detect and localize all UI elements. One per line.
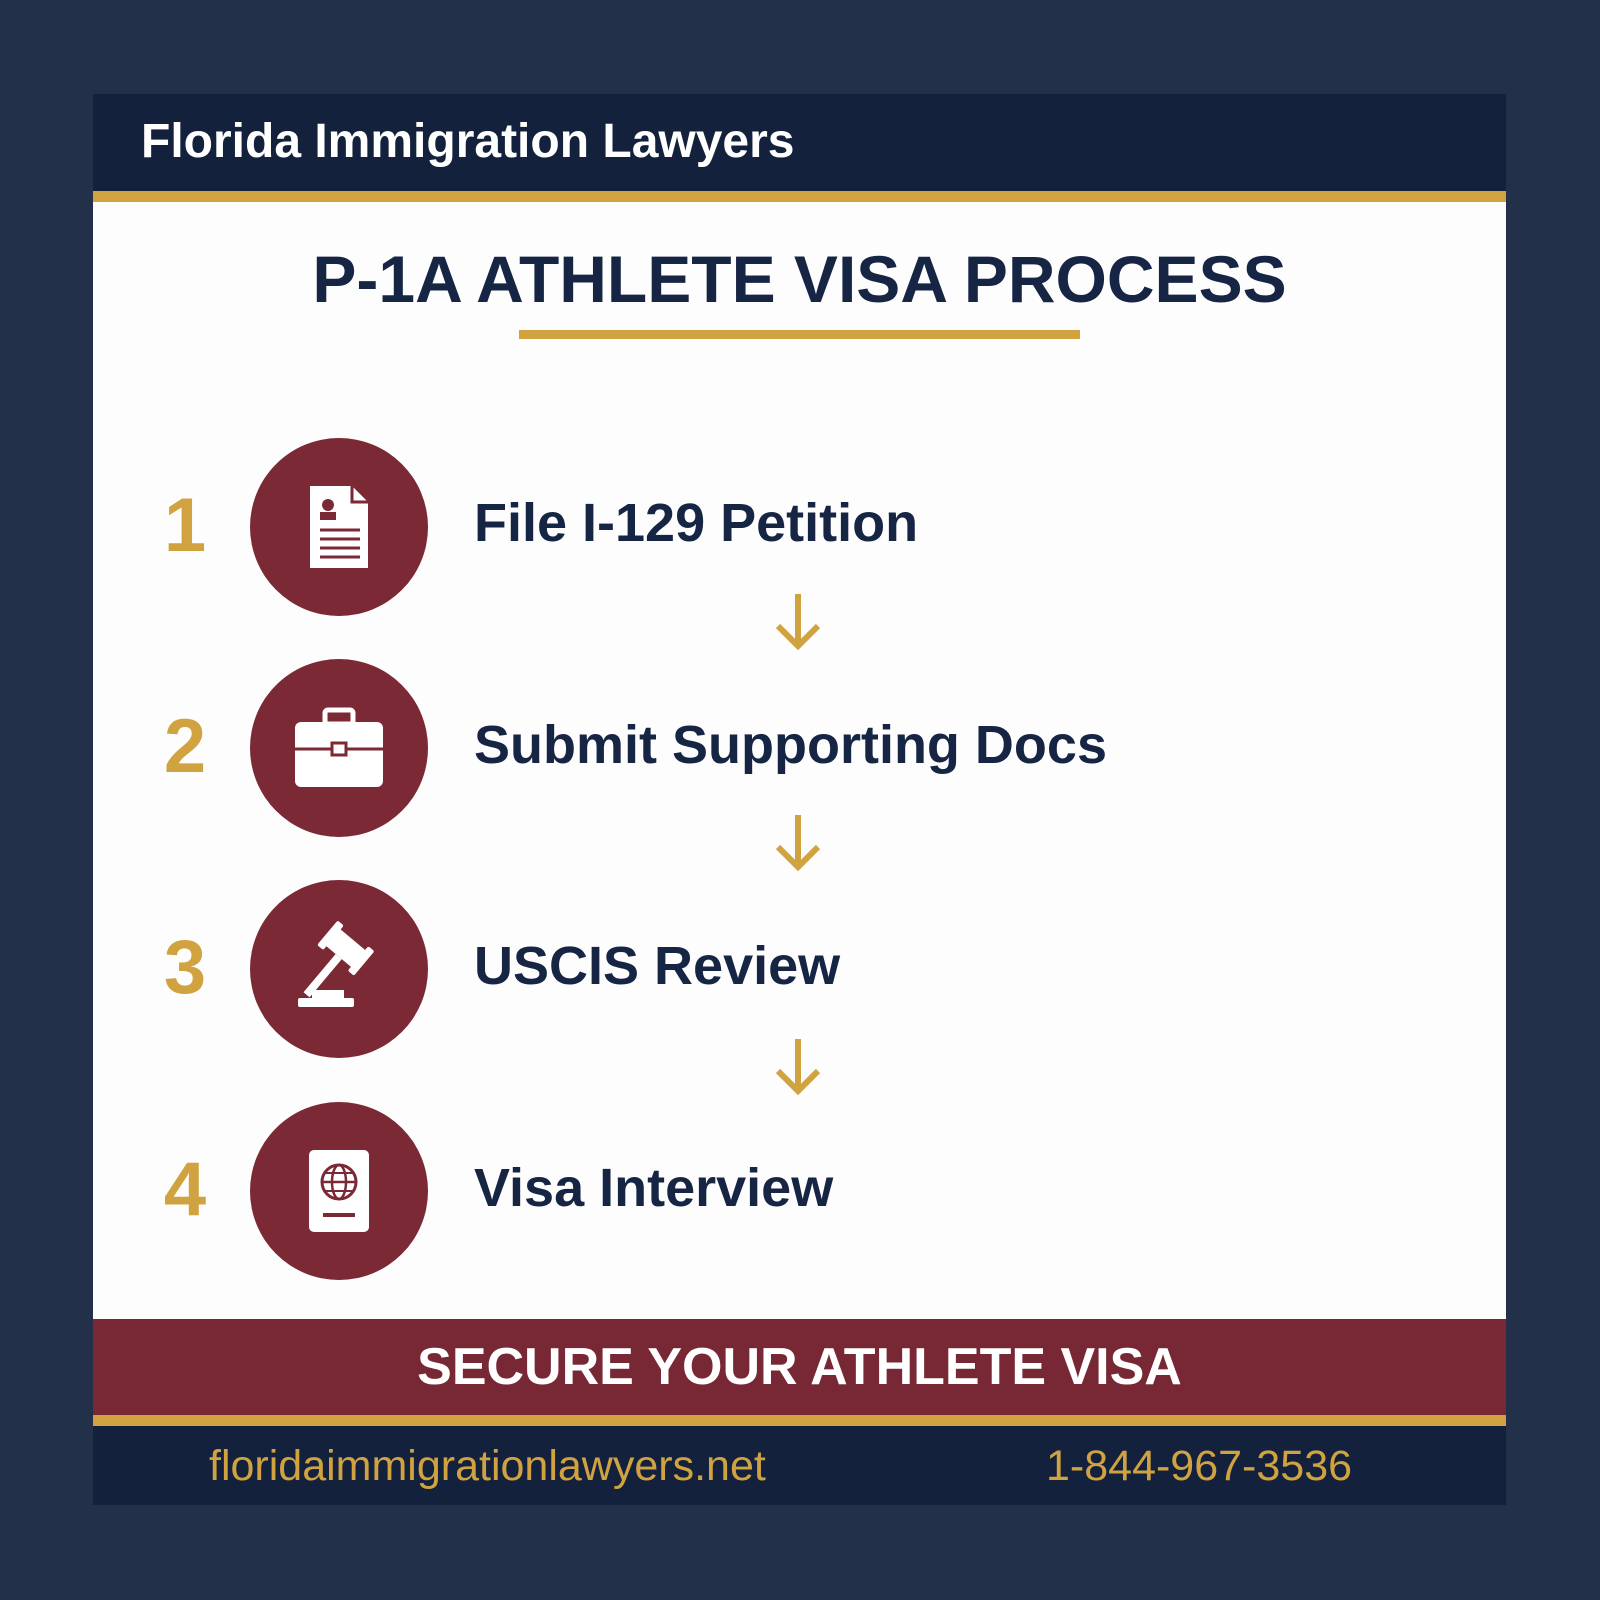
step 4 [164, 1102, 834, 1280]
arrow 1 [776, 594, 820, 650]
card [93, 94, 1506, 1505]
title: P-1A ATHLETE VISA PROCESS [312, 242, 1287, 316]
icon: passport [250, 1102, 428, 1280]
footer [93, 1426, 1506, 1505]
icon: gavel [250, 880, 428, 1058]
icon: briefcase [250, 659, 428, 837]
title underline [519, 330, 1080, 339]
footer gold stripe [93, 1415, 1506, 1426]
number 1: 1 [164, 483, 206, 568]
icon: document [250, 438, 428, 616]
banner: call to action [93, 1319, 1506, 1415]
banner: call to action: SECURE YOUR ATHLETE VISA [417, 1338, 1182, 1396]
footer url: floridaimmigrationlawyers.net [209, 1442, 766, 1490]
header text: Florida Immigration Lawyers [141, 115, 794, 168]
step text 4: Visa Interview [474, 1158, 833, 1218]
step text 1: File I-129 Petition [474, 493, 918, 553]
header bar [93, 94, 1506, 191]
header gold stripe [93, 191, 1506, 202]
arrow 3 [776, 1039, 820, 1095]
step 1 [164, 438, 918, 616]
step text 2: Submit Supporting Docs [474, 715, 1107, 775]
step 2 [164, 659, 1107, 837]
step text 3: USCIS Review [474, 936, 840, 996]
step 3 [164, 880, 840, 1058]
arrow 2 [776, 815, 820, 871]
number 4: 4 [164, 1147, 206, 1232]
number 2: 2 [164, 704, 206, 789]
footer phone: 1-844-967-3536 [1046, 1442, 1352, 1490]
number 3: 3 [164, 925, 206, 1010]
